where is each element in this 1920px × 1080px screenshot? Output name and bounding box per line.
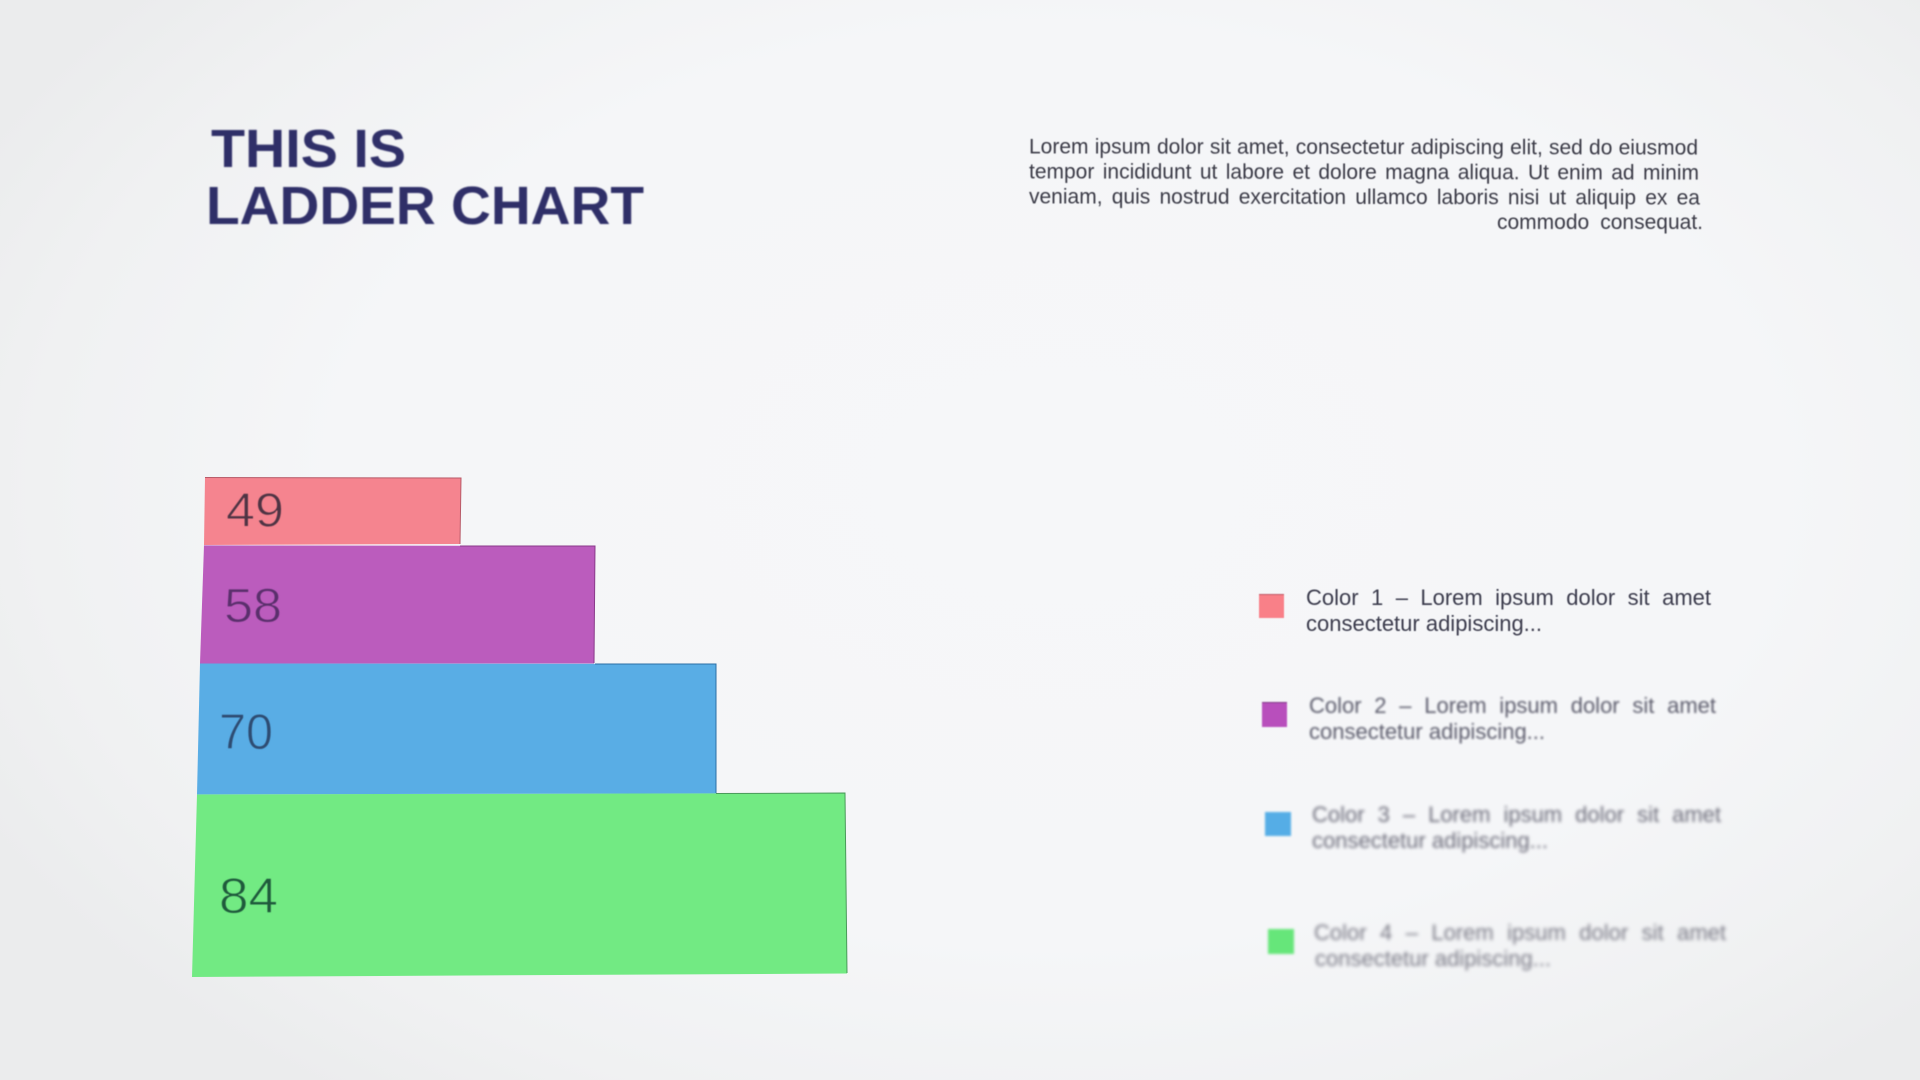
bar: pink 49: 49 (226, 484, 284, 538)
legend item: color 2 (1261, 693, 1717, 745)
title (206, 119, 644, 236)
legend item: color 3 (1263, 802, 1722, 855)
description text block: tempor incididunt ut labore et dolore magna aliqua. Ut enim ad minim (1029, 160, 1699, 185)
description text block: Lorem ipsum dolor sit amet, consectetur adipiscing elit, sed do eiusmod (1029, 135, 1698, 160)
legend item: color 1: consectetur adipiscing... (1306, 611, 1542, 636)
bar: green 84 (192, 793, 847, 977)
bar: green 84: 84 (219, 868, 278, 924)
legend item: color 4: consectetur adipiscing... (1315, 946, 1551, 971)
description text block: veniam, quis nostrud exercitation ullamco laboris nisi ut aliquip ex ea (1029, 185, 1700, 210)
title: LADDER CHART (206, 176, 644, 236)
title: THIS IS (211, 119, 406, 179)
description text block (1028, 135, 1703, 234)
bar: purple 58 (200, 545, 595, 664)
legend item: color 1 (1258, 585, 1712, 636)
bar: blue 70 (197, 664, 716, 794)
legend item: color 1: Color 1 – Lorem ipsum dolor sit amet (1306, 585, 1711, 610)
bar: purple 58: 58 (224, 580, 282, 633)
legend item: color 4 (1266, 920, 1728, 973)
bar: pink 49 (204, 478, 461, 545)
ladder bar chart (192, 478, 847, 977)
legend item: color 2: Color 2 – Lorem ipsum dolor sit amet (1309, 693, 1716, 718)
legend item: color 3: Color 3 – Lorem ipsum dolor sit amet (1312, 802, 1721, 827)
legend item: color 2: consectetur adipiscing... (1309, 719, 1545, 744)
bar: blue 70: 70 (219, 704, 273, 760)
legend item: color 3: consectetur adipiscing... (1312, 828, 1548, 853)
legend item: color 4: Color 4 – Lorem ipsum dolor sit amet (1314, 920, 1726, 945)
description text block: commodo consequat. (1497, 211, 1703, 234)
